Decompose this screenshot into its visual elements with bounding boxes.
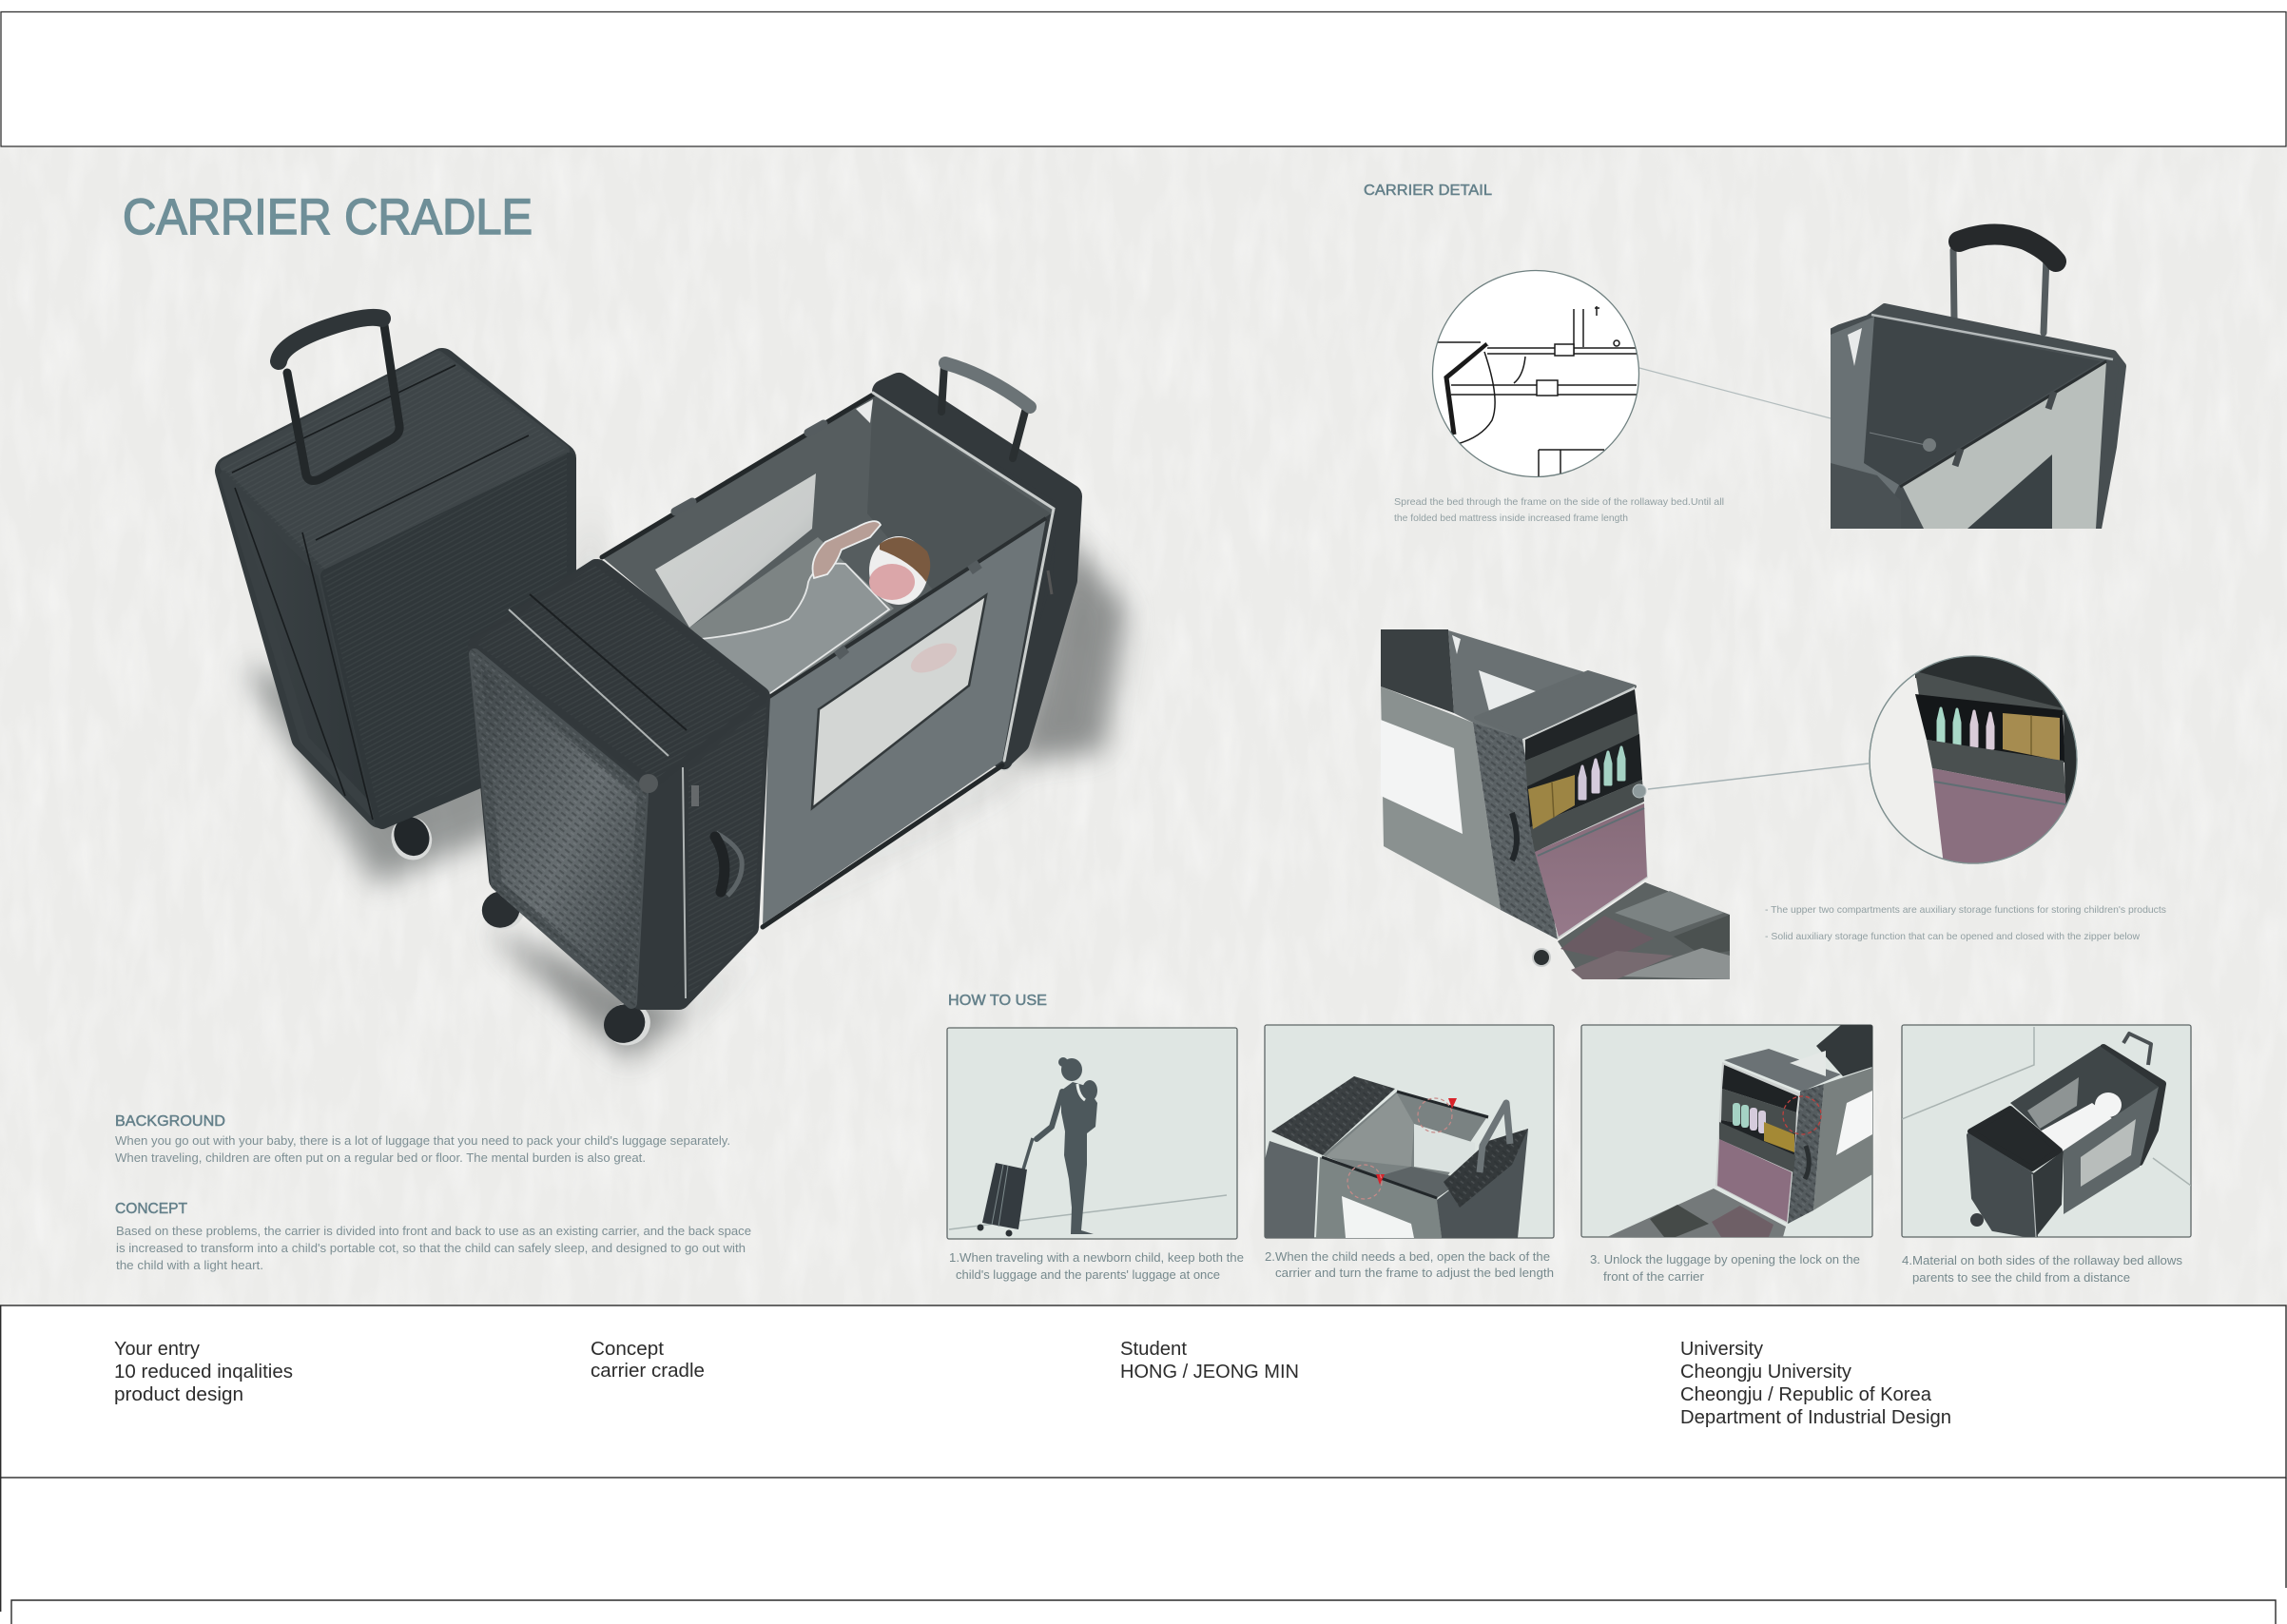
step 1 panel — [947, 1028, 1237, 1239]
handle — [1953, 234, 2056, 333]
footer: university — [1680, 1339, 1951, 1428]
body — [1831, 307, 2122, 529]
footer box — [1, 1305, 2286, 1478]
boxes — [1528, 775, 1575, 829]
top and side — [1476, 672, 1635, 737]
detail text: Spread the bed through the frame on the side of the rollaway bed.Until all — [1394, 496, 1724, 508]
suitcase body — [221, 352, 569, 822]
concept section: the child with a light heart. — [116, 1259, 263, 1272]
heading: carrier detail: CARRIER DETAIL — [1364, 183, 1492, 199]
interior walls — [1381, 629, 1454, 713]
near wall with window — [763, 518, 1046, 924]
door interior — [1522, 686, 1648, 939]
step 2 caption — [1265, 1249, 1554, 1280]
ground line — [949, 1195, 1227, 1229]
footer: student: Student — [1120, 1339, 1187, 1360]
footer: concept: carrier cradle — [591, 1361, 705, 1382]
step 4 caption: 4.Material on both sides of the rollaway bed allows — [1902, 1253, 2183, 1267]
step 1 caption: child's luggage and the parents' luggage at once — [956, 1267, 1220, 1282]
footer: university: Cheongju / Republic of Korea — [1680, 1384, 1932, 1405]
storage notes: - The upper two compartments are auxiliary storage functions for storing children's products — [1765, 904, 2166, 916]
person silhouette with baby — [1037, 1057, 1097, 1234]
footer: university: Department of Industrial Design — [1680, 1407, 1951, 1428]
detail render: storage compartments — [1381, 629, 1730, 979]
paper textured panel — [0, 147, 2287, 1305]
footer: student — [1120, 1339, 1299, 1382]
bottles — [1580, 747, 1624, 799]
heading: how to use: HOW TO USE — [948, 993, 1047, 1009]
background section: BACKGROUND — [115, 1113, 225, 1130]
footer: your entry: 10 reduced inqalities — [114, 1362, 293, 1382]
footer: concept — [591, 1339, 705, 1382]
storage notes: - Solid auxiliary storage function that can be opened and closed with the zipper below — [1765, 931, 2140, 942]
small suitcase — [978, 1138, 1033, 1236]
step 4 panel — [1902, 1025, 2191, 1237]
rear handle — [941, 363, 1030, 458]
step 4 caption: parents to see the child from a distance — [1912, 1270, 2130, 1285]
background section — [115, 1113, 730, 1165]
suitcase handle — [279, 318, 399, 481]
connector line 1 — [1639, 368, 1831, 418]
front case — [471, 566, 766, 1008]
detail text: the folded bed mattress inside increased frame length — [1394, 512, 1628, 524]
step 2 caption: 2.When the child needs a bed, open the back of the — [1265, 1249, 1550, 1264]
fold-out flap — [1558, 882, 1730, 979]
step 1 caption — [949, 1250, 1244, 1282]
step 1 caption: 1.When traveling with a newborn child, keep both the — [949, 1250, 1244, 1265]
storage notes — [1765, 904, 2166, 942]
step 2 caption: carrier and turn the frame to adjust the bed length — [1275, 1266, 1554, 1280]
background section: When traveling, children are often put on a regular bed or floor. The mental burden is also great. — [115, 1151, 646, 1165]
suitcase shadow — [242, 504, 594, 884]
red rotation markers — [1347, 1098, 1457, 1199]
detail render: open frame — [1831, 234, 2122, 529]
footer: your entry — [114, 1339, 293, 1405]
side handle and lock — [691, 785, 742, 896]
long wall — [1381, 686, 1501, 910]
step 3 caption: front of the carrier — [1603, 1269, 1705, 1284]
cradle shadows — [485, 532, 1127, 1060]
step 3 caption: 3. Unlock the luggage by opening the lock on the — [1590, 1252, 1860, 1266]
background section: When you go out with your baby, there is a lot of luggage that you need to pack your child's luggage separately. — [115, 1134, 730, 1148]
step 3 caption — [1590, 1252, 1860, 1284]
concept section: is increased to transform into a child's portable cot, so that the child can safely sleep, and designed to go out with — [116, 1242, 746, 1255]
rear case — [884, 385, 1070, 756]
concept section — [115, 1201, 751, 1272]
footer: your entry: Your entry — [114, 1339, 200, 1360]
baby — [701, 521, 930, 694]
suitcase wheel — [384, 810, 439, 867]
step 4 caption — [1902, 1253, 2183, 1285]
top empty frame — [1, 11, 2286, 146]
footer: concept: Concept — [591, 1339, 664, 1360]
connector line 2 — [1648, 764, 1869, 789]
step 2 panel — [1265, 1025, 1554, 1238]
concept section: Based on these problems, the carrier is divided into front and back to use as an existing carrier, and the back space — [116, 1225, 751, 1238]
lower frame edges — [1, 1478, 2286, 1612]
footer: university: University — [1680, 1339, 1763, 1360]
frame rims — [602, 393, 1054, 927]
product hero: open cradle — [471, 363, 1127, 1060]
footer: student: HONG / JEONG MIN — [1120, 1362, 1299, 1382]
bottom frame — [11, 1600, 2276, 1624]
footer: university: Cheongju University — [1680, 1362, 1851, 1382]
cradle wheels — [476, 747, 1014, 1054]
concept section: CONCEPT — [115, 1201, 187, 1217]
product hero: closed suitcase — [221, 318, 594, 884]
cradle interior — [602, 395, 1056, 699]
detail callout: frame line drawing — [1432, 270, 1639, 478]
footer: your entry: product design — [114, 1384, 243, 1405]
step 3 panel — [1581, 1025, 1872, 1237]
detail callout: storage close-up — [1870, 656, 2077, 865]
detail text — [1394, 496, 1724, 524]
title: CARRIER CRADLE — [123, 189, 533, 245]
